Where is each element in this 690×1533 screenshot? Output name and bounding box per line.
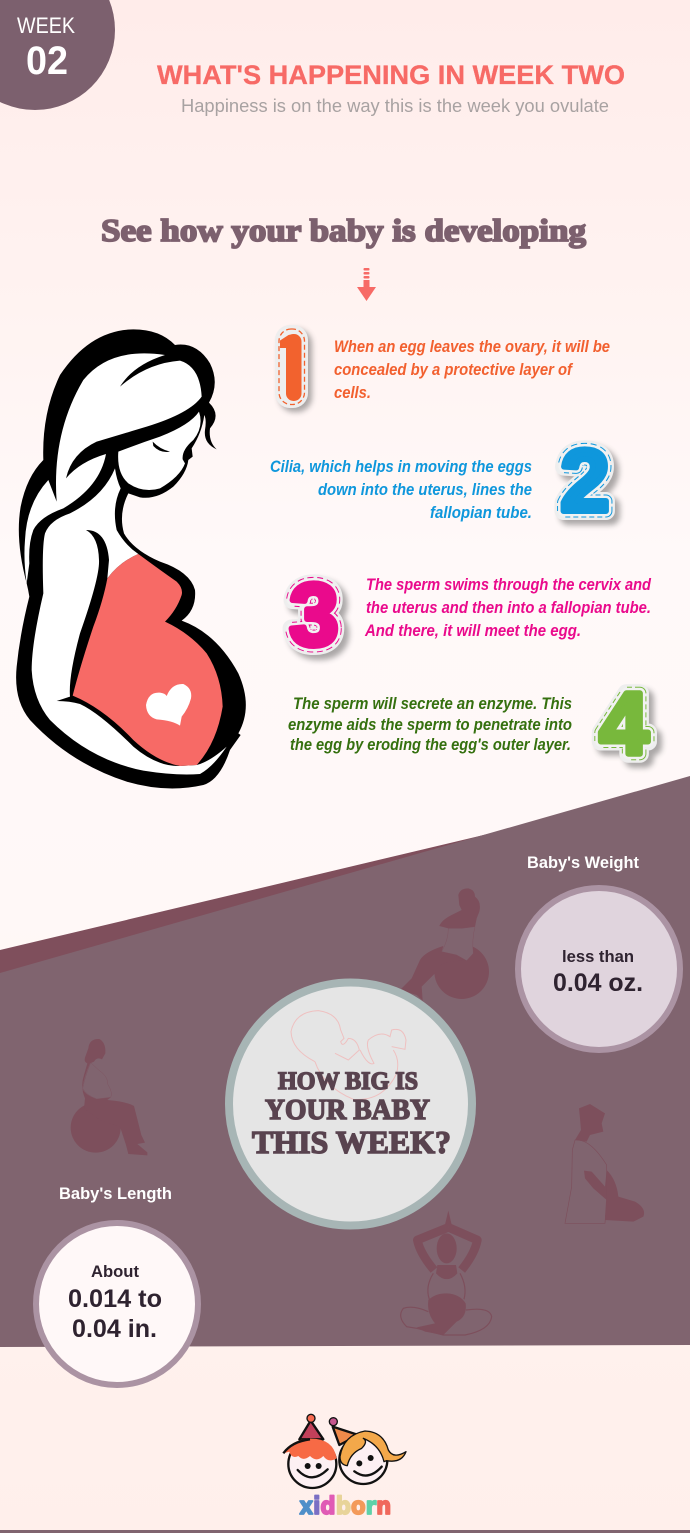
weight label: Baby's Weight — [527, 853, 639, 872]
number 2 sticker: 2 — [561, 431, 609, 530]
step 4 — [288, 674, 654, 778]
diagonal accent strip — [0, 834, 490, 985]
step 3 text: The sperm swims through the cervix and — [366, 576, 652, 594]
number 4 sticker: 4 — [605, 679, 654, 778]
white body — [32, 468, 227, 775]
step 2 text: Cilia, which helps in moving the eggs — [270, 458, 532, 476]
step 4 text: The sperm will secrete an enzyme. This — [293, 695, 572, 713]
closed eye — [153, 442, 170, 452]
bottom rule — [0, 1530, 690, 1533]
boy with party hat — [283, 1414, 337, 1488]
number 4 sticker: 4 — [600, 674, 649, 773]
week badge — [0, 0, 115, 110]
silhouette: woman on ball, right — [400, 888, 489, 1001]
silhouette: kneeling woman — [565, 1104, 644, 1223]
number 4 sticker: 4 — [600, 674, 649, 773]
weight circle: less than — [562, 947, 634, 966]
how big text: THIS WEEK? — [252, 1124, 451, 1160]
logo — [283, 1414, 406, 1520]
step 3 text — [364, 576, 652, 640]
black silhouette — [16, 329, 246, 788]
central circle: how big is your baby — [229, 982, 472, 1226]
pregnant woman illustration — [16, 329, 246, 788]
length circle — [36, 1223, 198, 1385]
step 1 — [275, 325, 610, 416]
week badge: 02 — [26, 39, 68, 83]
how big text: YOUR BABY — [265, 1094, 430, 1126]
length circle: 0.014 to — [68, 1285, 162, 1313]
step 4 text: the egg by eroding the egg's outer layer. — [290, 736, 571, 754]
step 3 — [290, 565, 652, 669]
step 2 text — [270, 458, 532, 522]
step 1 text — [334, 338, 610, 402]
belly — [73, 554, 223, 766]
heart — [146, 684, 191, 726]
subtitle: Happiness is on the way this is the week you ovulate — [181, 96, 609, 116]
arrow — [357, 268, 376, 301]
step 2 text: fallopian tube. — [430, 504, 532, 522]
number 3 sticker: 3 — [295, 570, 343, 669]
step 2 — [270, 431, 614, 535]
number 2 sticker: 2 — [561, 431, 609, 530]
step 3 text: the uterus and then into a fallopian tube. — [366, 599, 651, 617]
step 1 text: When an egg leaves the ovary, it will be — [334, 338, 610, 356]
step 2 text: down into the uterus, lines the — [318, 481, 532, 499]
kidborn wordmark: xidborn — [299, 1492, 391, 1520]
how big text: HOW BIG IS — [278, 1068, 418, 1095]
weight circle — [518, 888, 680, 1050]
title: WHAT'S HAPPENING IN WEEK TWO — [157, 60, 625, 90]
silhouette: yoga woman — [401, 1211, 492, 1335]
how big text — [252, 1068, 451, 1160]
silhouette: woman on ball, left — [71, 1039, 147, 1155]
weight circle: 0.04 oz. — [553, 969, 643, 997]
number 2 sticker: 2 — [561, 431, 609, 530]
number 3 sticker: 3 — [290, 565, 338, 664]
heading: See how your baby is developing — [101, 212, 586, 248]
white hair — [24, 353, 202, 583]
step 4 text: enzyme aids the sperm to penetrate into — [288, 716, 572, 734]
length circle: About — [91, 1262, 139, 1281]
number 3 sticker: 3 — [290, 565, 338, 664]
face — [118, 412, 201, 490]
step 4 text — [288, 695, 572, 754]
length label: Baby's Length — [59, 1184, 172, 1203]
length circle: 0.04 in. — [72, 1315, 157, 1343]
number 4 sticker: 4 — [600, 674, 649, 773]
number 3 sticker: 3 — [290, 565, 338, 664]
number 2 sticker: 2 — [561, 431, 609, 530]
step 1 text: cells. — [334, 384, 371, 402]
number 2 sticker: 2 — [566, 436, 614, 535]
number 3 sticker: 3 — [290, 565, 338, 664]
number 4 sticker: 4 — [600, 674, 649, 773]
step 1 text: concealed by a protective layer of — [334, 361, 573, 379]
baby outline — [291, 1011, 406, 1100]
girl with party hat — [329, 1418, 406, 1484]
purple stats panel — [0, 776, 690, 1347]
step 3 text: And there, it will meet the egg. — [364, 622, 581, 640]
number 1 sticker: 1 — [269, 318, 317, 417]
week badge: WEEK — [17, 13, 75, 38]
